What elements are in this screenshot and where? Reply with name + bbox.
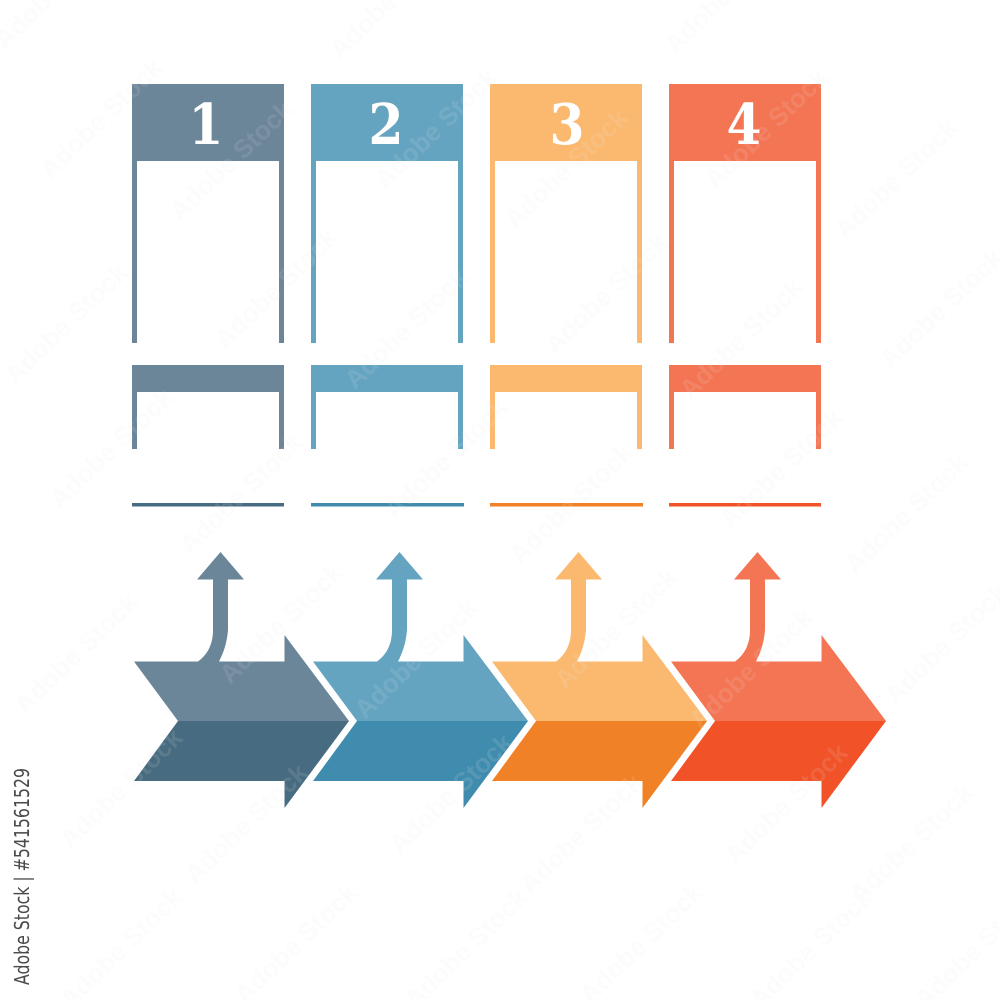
line 4 — [669, 503, 821, 506]
watermark layer: Adobe Stock — [338, 262, 474, 394]
watermark layer: Adobe Stock — [843, 777, 979, 909]
watermark layer: Adobe Stock — [53, 722, 189, 854]
panel 1 with number — [132, 84, 284, 343]
arrow 3 upper half — [492, 635, 707, 721]
panel 3 with number — [490, 84, 642, 343]
arrow 1 — [134, 552, 349, 808]
arrow 2 branch — [376, 552, 423, 662]
watermark layer: Adobe Stock — [673, 272, 809, 404]
number 1: 1 — [188, 92, 224, 158]
column 3: orange — [490, 84, 707, 808]
arrow 1 upper half — [134, 635, 349, 721]
line 2 — [311, 503, 464, 506]
panel 4 small — [669, 365, 821, 449]
stock id vertical text: Adobe Stock | #541561529 — [10, 768, 34, 985]
panel 4 with number — [669, 84, 821, 343]
arrow 4 — [671, 552, 886, 808]
arrow 4 branch — [734, 552, 781, 662]
watermark layer: Adobe Stock — [548, 562, 684, 694]
watermark layer: Adobe Stock — [213, 557, 349, 689]
line 3 — [490, 503, 643, 506]
arrow 4 lower half — [671, 721, 886, 808]
line 1 — [132, 503, 284, 506]
number 3: 3 — [550, 92, 584, 158]
watermark layer: Adobe Stock — [713, 402, 849, 534]
column 4: red-orange — [669, 84, 886, 808]
watermark layer: Adobe Stock — [538, 227, 674, 359]
column 1: grey-blue — [132, 84, 349, 808]
arrow 2 lower half — [313, 721, 528, 808]
column 2: blue — [311, 84, 528, 808]
number 2: 2 — [368, 92, 404, 158]
watermark layer: Adobe Stock — [838, 447, 974, 579]
watermark layer: Adobe Stock — [178, 757, 314, 889]
panel 2 with number — [311, 84, 463, 343]
watermark layer: Adobe Stock — [163, 94, 299, 226]
watermark layer: Adobe Stock — [0, 257, 134, 389]
panel 1 small — [132, 365, 284, 449]
watermark layer: Adobe Stock — [383, 727, 519, 859]
arrow 3 lower half — [492, 721, 707, 808]
watermark layer: Adobe Stock — [8, 587, 144, 719]
watermark layer: Adobe Stock — [173, 427, 309, 559]
number 4: 4 — [726, 92, 762, 158]
panel 3 small — [490, 365, 642, 449]
watermark layer: Adobe Stock — [348, 592, 484, 724]
panel 2 small — [311, 365, 463, 449]
arrow 2 — [313, 552, 528, 808]
watermark layer: Adobe Stock — [513, 767, 649, 899]
watermark layer: Adobe Stock — [828, 112, 964, 244]
arrow 3 branch — [555, 552, 602, 662]
watermark layer: Adobe Stock — [683, 602, 819, 734]
watermark layer: Adobe Stock — [503, 437, 639, 569]
arrow 1 branch — [197, 552, 244, 662]
watermark layer: Adobe Stock — [498, 102, 634, 234]
watermark layer: Adobe Stock — [718, 737, 854, 869]
arrow 1 lower half — [134, 721, 349, 808]
watermark layer: Adobe Stock — [208, 222, 344, 354]
arrow 2 upper half — [313, 635, 528, 721]
arrow 4 upper half — [671, 635, 886, 721]
arrow 3 — [492, 552, 707, 808]
watermark layer: Adobe Stock — [33, 52, 169, 184]
watermark layer: Adobe Stock — [43, 382, 179, 514]
watermark layer: Adobe Stock — [698, 62, 834, 194]
watermark layer: Adobe Stock — [378, 392, 514, 524]
watermark layer: Adobe Stock — [368, 62, 504, 194]
